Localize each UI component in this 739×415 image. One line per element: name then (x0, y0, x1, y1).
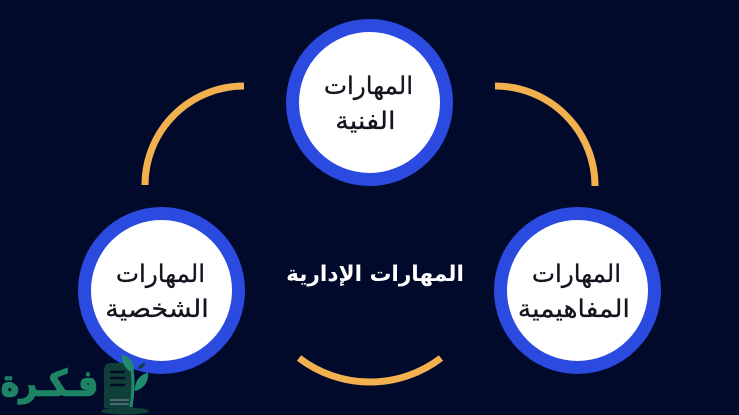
circle: interpersonal skills: المهارات (116, 258, 205, 288)
arc: bottom (299, 358, 441, 382)
circle: interpersonal skills: الشخصية (106, 294, 209, 322)
circle: conceptual skills: المهارات (532, 258, 621, 288)
center title: المهارات الإدارية (286, 262, 464, 287)
circle: interpersonal skills (78, 207, 245, 374)
circle: technical skills: المهارات (324, 70, 413, 100)
arc: top right (495, 86, 595, 186)
logo icon: document with leaves (101, 355, 149, 414)
circle: technical skills: الفنية (335, 106, 396, 134)
circle: conceptual skills: المفاهيمية (518, 294, 630, 322)
circle: technical skills (286, 19, 453, 186)
arc: top left (145, 86, 244, 185)
circle: conceptual skills (494, 207, 661, 374)
logo wordmark: فـكـرة (1, 363, 98, 405)
